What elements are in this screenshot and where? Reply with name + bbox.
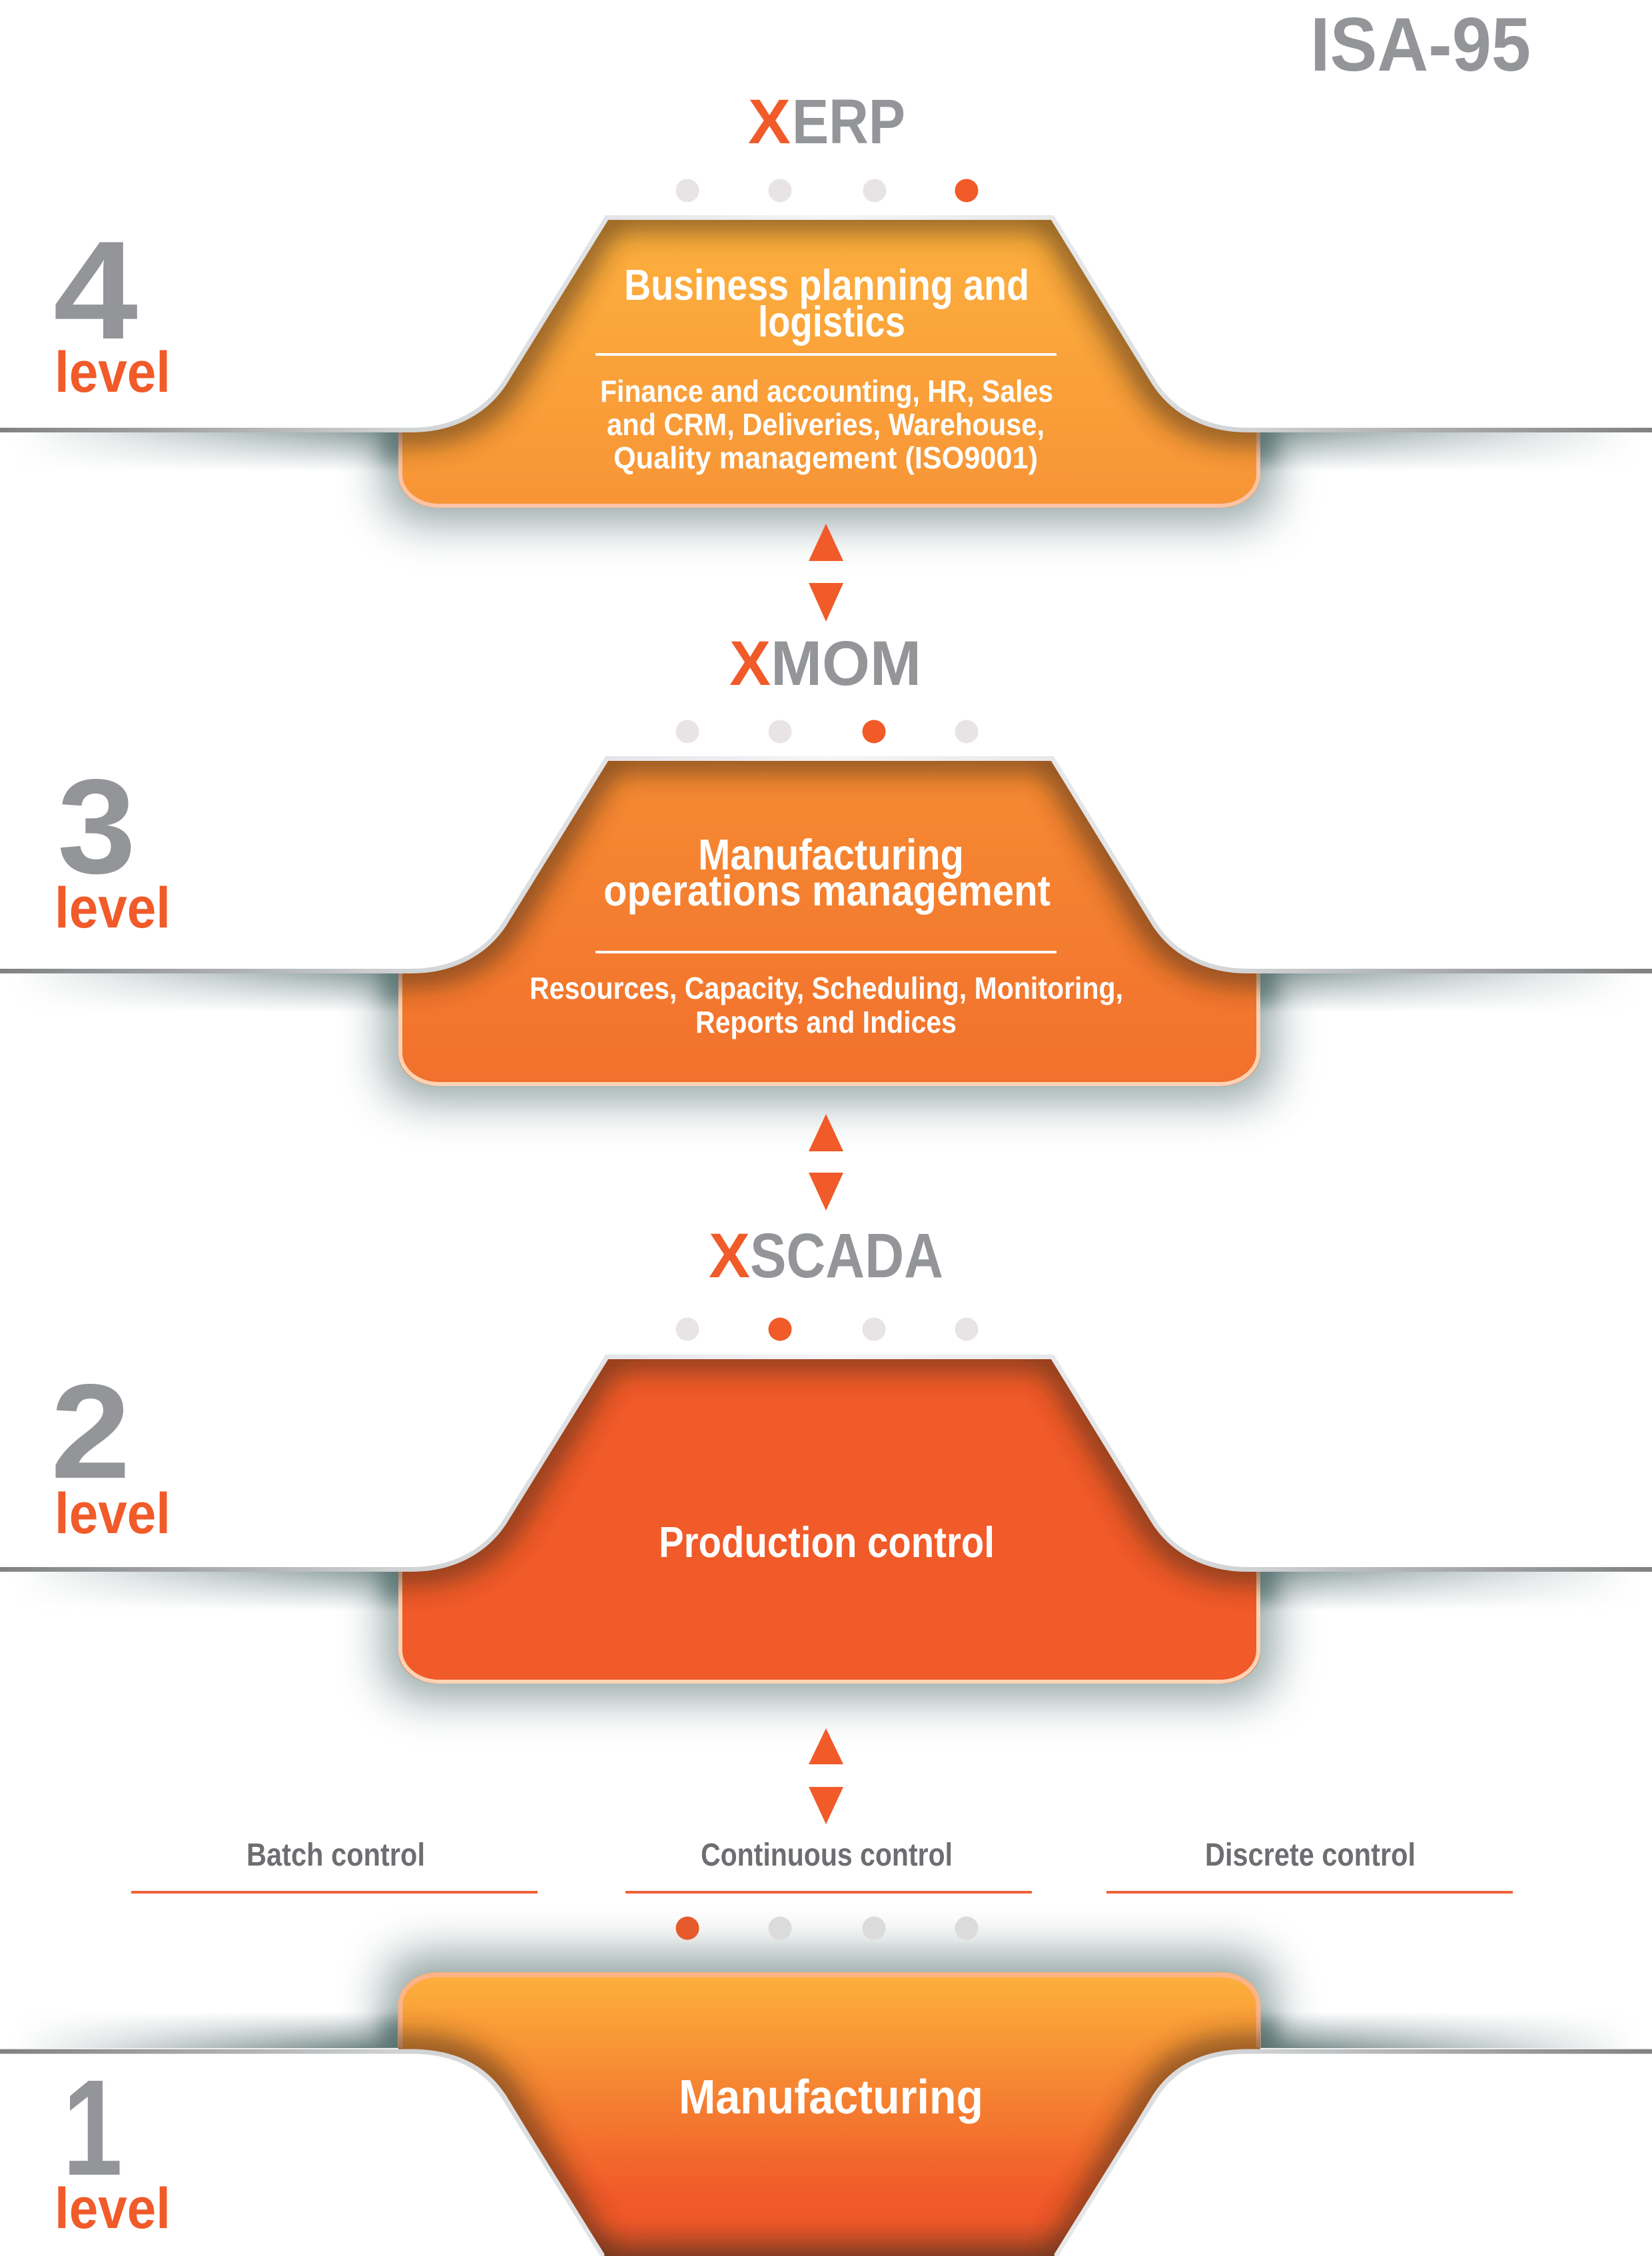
progress dots: level 2 active [675,1318,978,1341]
panel: level 4 business planning [0,217,1652,522]
system heading: XSCADA: SCADA [750,1221,943,1291]
heading: Business planning and logistics: Business planning and [624,261,1029,309]
panel: level 1 manufacturing [0,1954,1652,2256]
progress dots: level 4 active [675,179,978,203]
progress dots: level 1 active [675,1916,978,1940]
text: level 4 functions: and CRM, Deliveries, Warehouse, [607,407,1044,442]
heading: Business planning and logistics [624,261,1029,346]
heading: Manufacturing operations management: operations management [604,866,1050,915]
heading: Manufacturing: Manufacturing [679,2071,983,2124]
control type: Continuous control [625,1838,1032,1894]
heading: Business planning and logistics: logistics [758,297,905,346]
system heading: XMOM: MOM [771,628,921,699]
text: level 4 functions: Finance and accounting, HR, Sales [600,374,1053,408]
arrows: level 4 to level 3 [809,524,843,622]
system heading: XERP: X [748,87,791,157]
heading: Production control: Production control [659,1518,995,1566]
heading: Manufacturing operations management [604,830,1050,915]
control type: Discrete control [1106,1838,1513,1894]
level label: 3 level [55,751,171,940]
level label: 1 level: 1 [63,2051,123,2204]
text: level 3 functions: Resources, Capacity, Scheduling, Monitoring, [530,971,1123,1005]
level label: 2 level [51,1356,171,1546]
heading: Manufacturing operations management: Manufacturing [698,830,964,879]
level label: 4 level: level [55,340,171,404]
level label: 1 level: level [55,2177,171,2241]
control type: Batch control: Batch control [246,1838,425,1873]
system heading: XERP [748,87,905,157]
text: level 3 functions: Reports and Indices [695,1005,957,1039]
text: level 4 functions: Quality management (ISO9001) [614,440,1038,475]
level label: 4 level [53,212,171,404]
level label: 2 level: level [55,1482,171,1546]
system heading: XSCADA: X [709,1221,750,1291]
level label: 4 level: 4 [53,212,138,368]
text: level 4 functions [600,374,1053,475]
system heading: XERP: ERP [792,87,905,157]
level label: 2 level: 2 [51,1356,131,1506]
control type: Discrete control: Discrete control [1205,1838,1416,1873]
level label: 3 level: level [55,876,171,940]
arrows: level 2 to level 1 [809,1728,843,1824]
progress dots: level 3 active [675,720,978,744]
text: level 3 functions [530,971,1123,1039]
panel: level 3 manufacturing operations [0,758,1652,1101]
system heading: XMOM: X [729,628,771,699]
arrows: level 3 to level 2 [809,1114,843,1211]
control type: Batch control [131,1838,538,1894]
level label: 3 level: 3 [57,751,136,901]
panel: level 2 production control [0,1356,1652,1698]
control type: Continuous control: Continuous control [701,1838,953,1873]
level label: 1 level [55,2051,171,2241]
title: ISA-95: ISA-95 [1310,3,1531,87]
